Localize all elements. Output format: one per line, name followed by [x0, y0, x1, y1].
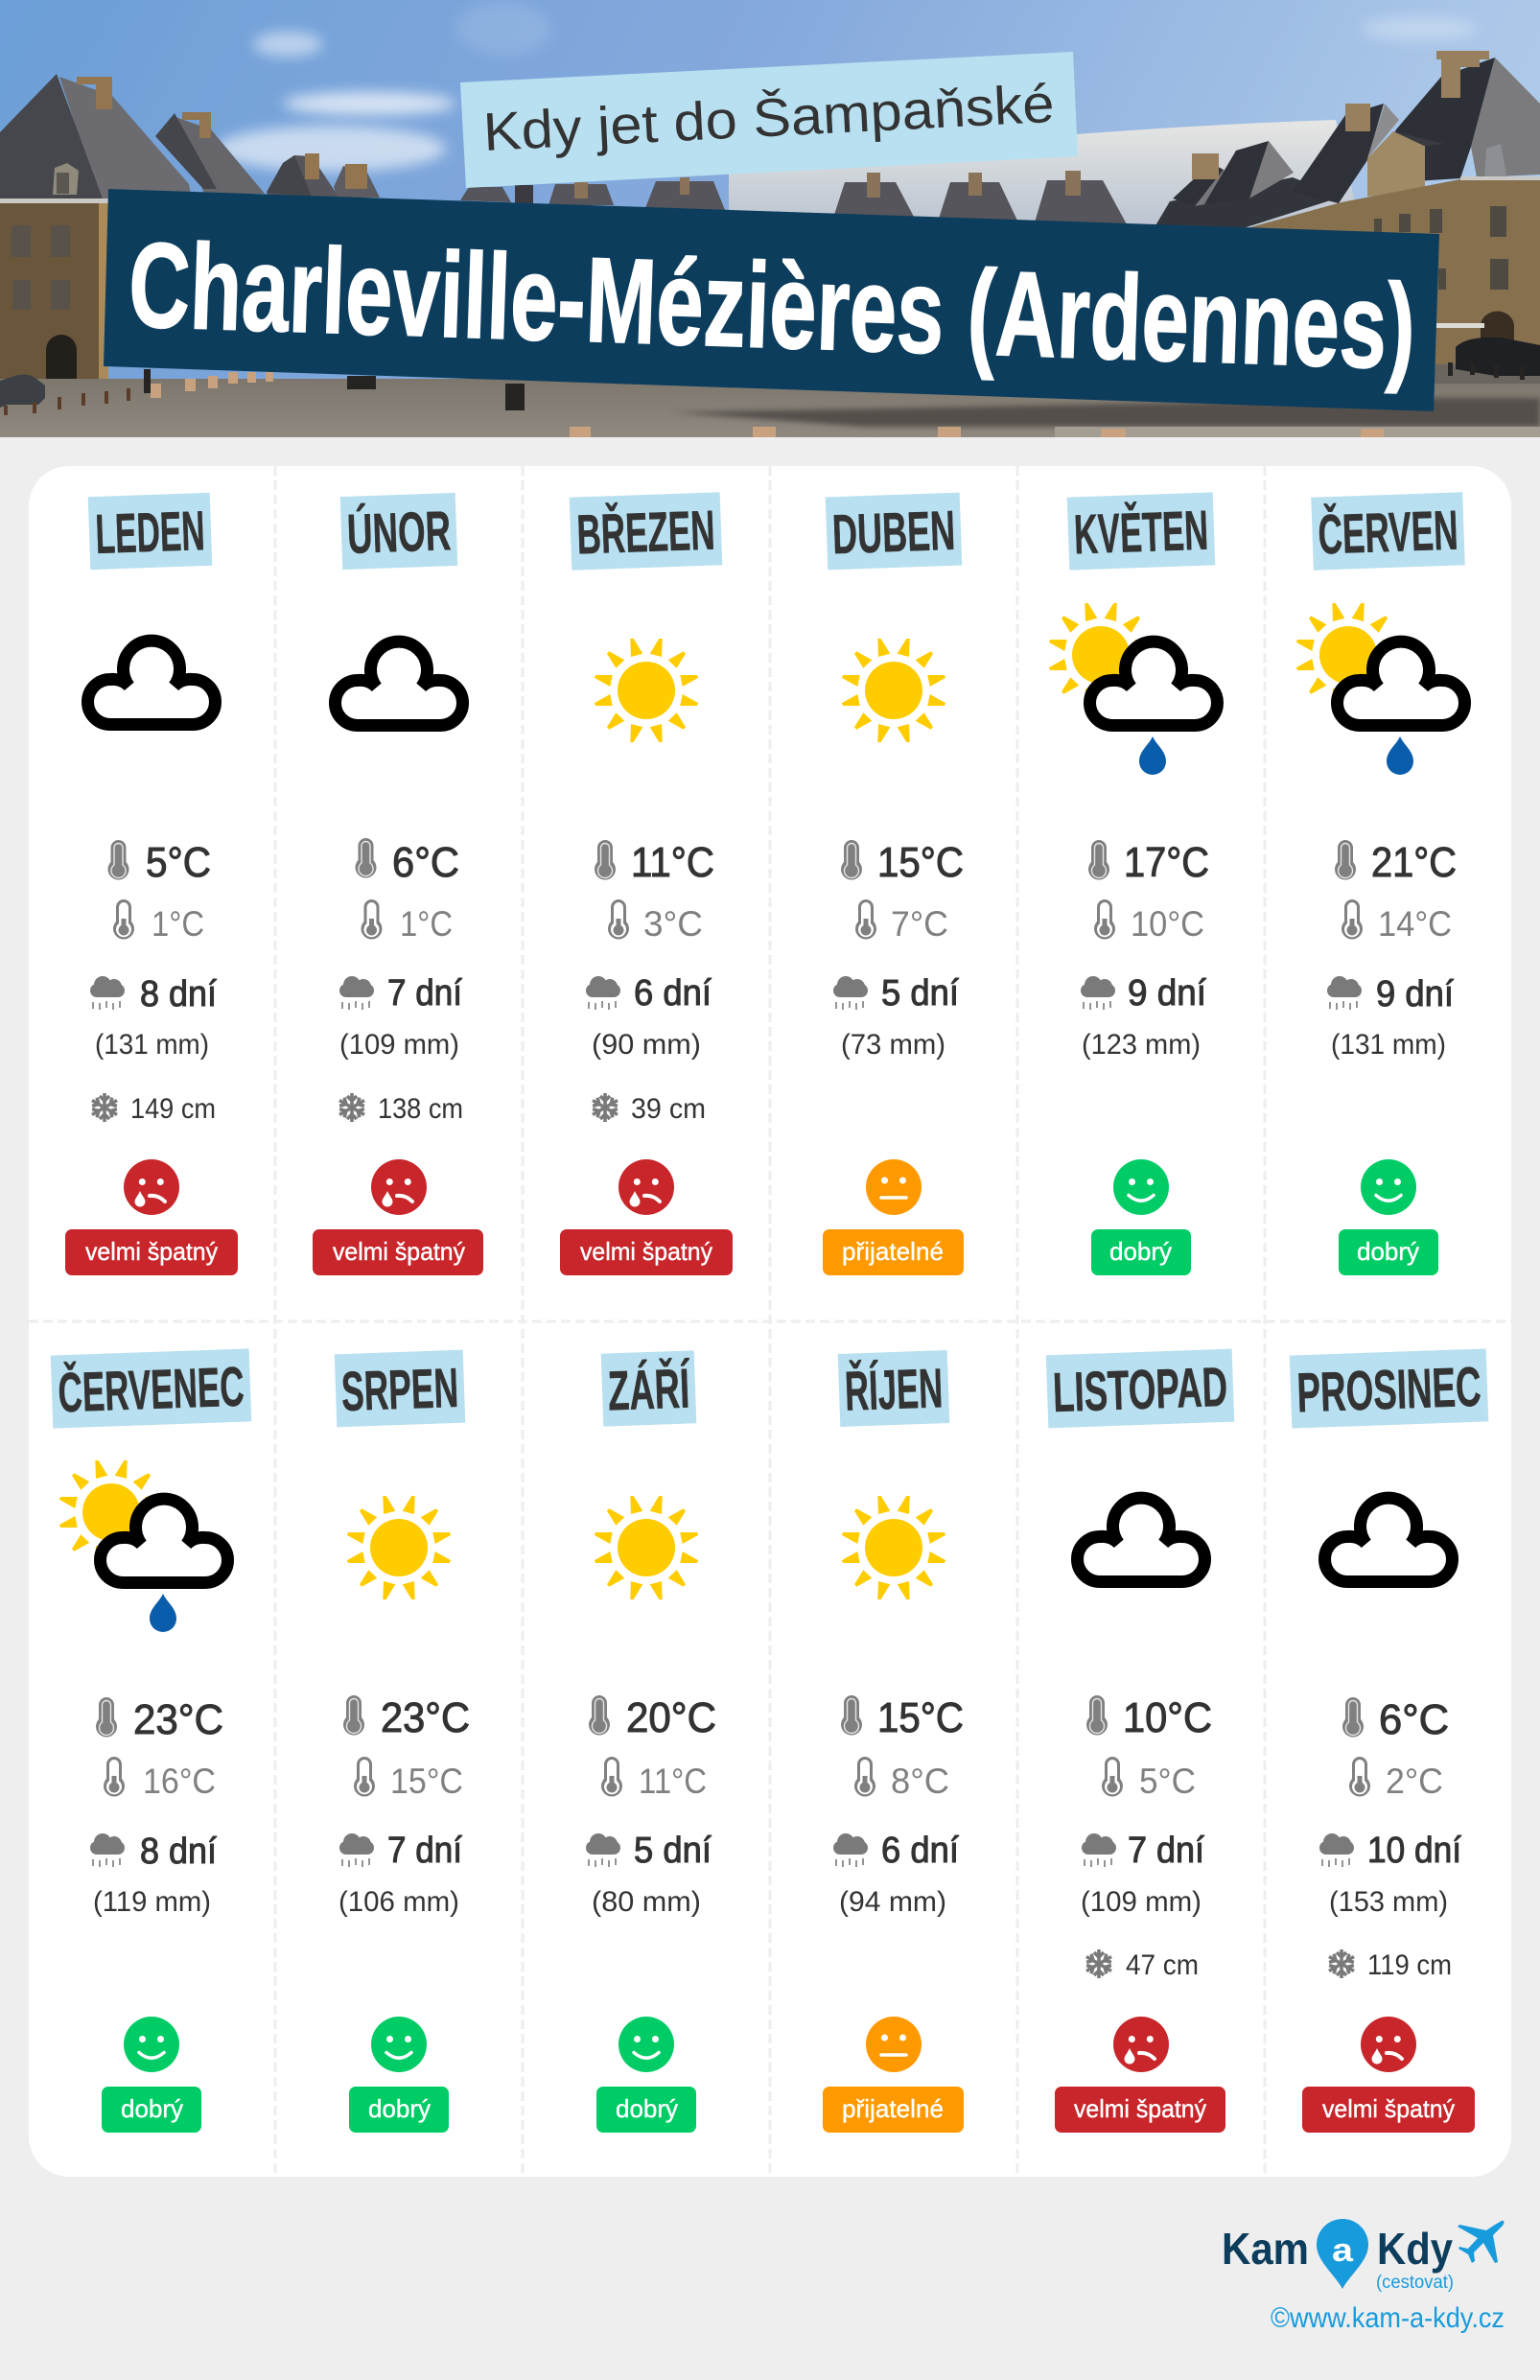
high temperature: 6°C — [392, 839, 459, 886]
rating pill — [65, 1229, 238, 1275]
rain days — [339, 1831, 462, 1871]
icon: cloud — [1078, 1498, 1204, 1582]
logo: Kam a Kdy — [1222, 2219, 1504, 2293]
low temperature — [601, 1757, 707, 1801]
high temperature: 6°C — [1379, 1696, 1449, 1743]
rain days: 10 dní — [1367, 1831, 1461, 1871]
snow — [90, 1093, 216, 1125]
snow: 149 cm — [130, 1093, 216, 1125]
rating face — [1361, 2017, 1416, 2072]
subtitle ribbon: Kdy jet do Šampaňské — [460, 52, 1078, 188]
month label — [1046, 1349, 1234, 1428]
rating pill: dobrý — [616, 2094, 678, 2123]
rainfall: (131 mm) — [1331, 1029, 1446, 1061]
month label — [1067, 492, 1215, 571]
rating face — [866, 2017, 922, 2072]
rating face — [618, 1159, 674, 1215]
rating pill — [313, 1229, 483, 1275]
month label — [88, 493, 212, 570]
month label: ÚNOR — [346, 500, 452, 566]
snow: 47 cm — [1126, 1949, 1199, 1981]
rain days: 7 dní — [387, 1831, 462, 1871]
low temperature: 8°C — [891, 1762, 949, 1801]
rain days — [586, 973, 712, 1014]
high temperature: 21°C — [1371, 839, 1457, 886]
snow — [1085, 1949, 1199, 1981]
low temperature: 15°C — [390, 1762, 463, 1801]
icon: cloud — [88, 641, 215, 725]
rating pill — [560, 1229, 733, 1275]
rainfall: (109 mm) — [1081, 1886, 1202, 1918]
low temperature: 1°C — [152, 904, 204, 944]
high temperature — [1342, 1696, 1449, 1743]
month label: ČERVENEC — [57, 1356, 245, 1424]
rating pill: velmi špatný — [580, 1237, 712, 1266]
ground — [0, 379, 1540, 437]
cell: říjen — [823, 1350, 964, 2133]
rating pill: velmi špatný — [333, 1237, 465, 1266]
icon: sun — [842, 1496, 945, 1599]
icon: sun, cloud and rain drop — [1049, 603, 1217, 775]
website credit: ©www.kam-a-kdy.cz — [1271, 2302, 1505, 2334]
month label: LISTOPAD — [1052, 1356, 1228, 1424]
rating pill — [1339, 1229, 1438, 1275]
right buildings — [1152, 177, 1342, 232]
high temperature: 5°C — [146, 839, 211, 886]
rain days: 5 dní — [634, 1831, 712, 1871]
rain days: 5 dní — [881, 973, 959, 1014]
rain days: 8 dní — [140, 1832, 217, 1872]
icon: cloud — [336, 642, 462, 725]
snow: 138 cm — [378, 1093, 463, 1125]
rainfall: (106 mm) — [338, 1886, 459, 1918]
month label — [340, 493, 457, 570]
rainfall: (131 mm) — [95, 1029, 209, 1061]
rainfall: (153 mm) — [1329, 1886, 1448, 1918]
icon: map pin: a — [1332, 2232, 1354, 2269]
low temperature: 16°C — [143, 1762, 216, 1801]
high temperature — [589, 1694, 716, 1741]
month label: LEDEN — [94, 500, 206, 566]
subtitle ribbon: Kdy jet do Šampaňské: Kdy jet do Šampaňské — [481, 73, 1056, 162]
rainfall: (119 mm) — [93, 1886, 211, 1918]
rating pill: velmi špatný — [1074, 2094, 1206, 2123]
high temperature: 10°C — [1123, 1694, 1212, 1741]
icon: sun — [595, 639, 698, 742]
rating pill: dobrý — [121, 2094, 183, 2123]
high temperature — [595, 839, 714, 886]
low temperature — [1094, 899, 1204, 944]
icon: sun — [595, 1496, 698, 1599]
logo: Kam a Kdy: Kdy — [1377, 2224, 1453, 2274]
rating pill: přijatelné — [842, 2094, 944, 2123]
rain days — [339, 973, 462, 1014]
high temperature: 17°C — [1124, 839, 1209, 886]
rating face — [1113, 2017, 1169, 2072]
rain days — [833, 973, 959, 1014]
low temperature — [354, 1757, 463, 1801]
rating face — [124, 2017, 179, 2072]
rain days — [586, 1831, 712, 1871]
rating face — [124, 1159, 179, 1215]
cell: červenec — [51, 1348, 251, 2133]
low temperature: 5°C — [1139, 1762, 1196, 1801]
rain days: 6 dní — [881, 1831, 959, 1871]
icon: sun — [347, 1496, 451, 1599]
month label — [335, 1350, 465, 1427]
icon: cloud — [1325, 1498, 1452, 1582]
rating face — [371, 1159, 427, 1215]
month label: DUBEN — [831, 500, 956, 566]
high temperature — [1088, 839, 1209, 886]
low temperature: 7°C — [891, 904, 948, 944]
month label: BŘEZEN — [575, 500, 716, 566]
high temperature: 20°C — [626, 1694, 716, 1741]
icon: sun, cloud and rain drop — [1296, 603, 1464, 775]
icon: map pin — [1317, 2219, 1368, 2289]
rainfall: (109 mm) — [339, 1029, 459, 1061]
low temperature — [113, 899, 204, 944]
month label: ZÁŘÍ — [607, 1357, 691, 1422]
rating pill: dobrý — [368, 2094, 431, 2123]
rain days — [1081, 973, 1206, 1014]
low temperature: 2°C — [1386, 1762, 1443, 1801]
month label — [51, 1348, 251, 1429]
rating face — [1113, 1159, 1169, 1215]
rainfall: (123 mm) — [1082, 1029, 1201, 1061]
rating pill — [1055, 2087, 1225, 2133]
cell: duben — [823, 493, 964, 1275]
rating face — [1361, 1159, 1416, 1215]
low temperature — [1102, 1757, 1196, 1801]
rain days: 7 dní — [1128, 1831, 1204, 1871]
rating pill — [596, 2087, 696, 2133]
low temperature — [1342, 899, 1452, 944]
high temperature: 11°C — [631, 839, 714, 886]
rain days: 9 dní — [1128, 973, 1206, 1014]
low temperature — [608, 899, 703, 944]
high temperature — [841, 839, 964, 886]
rating pill — [1091, 1229, 1191, 1275]
rating pill — [823, 2087, 964, 2133]
high temperature — [1335, 839, 1457, 886]
month label — [570, 492, 722, 571]
high temperature — [841, 1694, 964, 1741]
high temperature — [355, 838, 459, 886]
rating pill — [823, 1229, 964, 1275]
rating pill: dobrý — [1357, 1237, 1419, 1266]
rainfall: (73 mm) — [841, 1029, 945, 1061]
cell: listopad — [1046, 1349, 1234, 2133]
cell: květen — [1049, 492, 1217, 1275]
cell: září — [586, 1350, 716, 2133]
rain days — [1082, 1831, 1204, 1871]
rating face — [618, 2017, 674, 2072]
header photo: Place Ducale — [0, 0, 1540, 437]
low temperature — [1349, 1757, 1443, 1801]
left buildings — [334, 166, 380, 198]
snow — [1327, 1949, 1452, 1981]
cell: prosinec — [1290, 1348, 1488, 2133]
snow — [338, 1093, 463, 1125]
low temperature — [361, 899, 453, 944]
snow: 119 cm — [1367, 1949, 1452, 1981]
month label: ŘÍJEN — [844, 1357, 944, 1423]
low temperature: 14°C — [1378, 904, 1452, 944]
rain days — [1319, 1831, 1461, 1871]
high temperature: 15°C — [877, 839, 964, 886]
rainfall: (90 mm) — [592, 1029, 701, 1061]
distant roofs — [460, 180, 1127, 224]
rating pill — [349, 2087, 449, 2133]
high temperature: 23°C — [133, 1696, 223, 1743]
rain days — [833, 1831, 959, 1871]
low temperature: 1°C — [400, 904, 453, 944]
cell: únor — [313, 493, 483, 1275]
rain days: 8 dní — [140, 974, 217, 1015]
high temperature: 23°C — [381, 1694, 470, 1741]
rating pill: přijatelné — [842, 1237, 944, 1266]
rain days — [90, 1832, 217, 1872]
rain days: 9 dní — [1376, 974, 1454, 1015]
high temperature — [107, 839, 211, 886]
panel: monthly climate table — [29, 466, 1511, 2177]
logo: Kam a Kdy: Kam — [1222, 2224, 1309, 2274]
rain days — [1327, 974, 1454, 1015]
cell: červen — [1296, 492, 1465, 1275]
rating pill — [1302, 2087, 1475, 2133]
icon: sun, cloud and rain drop — [59, 1460, 227, 1632]
low temperature: 3°C — [643, 904, 703, 944]
logo: Kam a Kdy: (cestovat) — [1376, 2273, 1454, 2293]
cell: březen — [560, 492, 733, 1275]
rainfall: (94 mm) — [839, 1886, 946, 1918]
rainfall: (80 mm) — [592, 1886, 701, 1918]
low temperature — [104, 1757, 216, 1801]
high temperature: 15°C — [877, 1694, 964, 1741]
cell: leden — [65, 493, 238, 1275]
icon: sun — [842, 639, 945, 742]
rating pill: dobrý — [1109, 1237, 1172, 1266]
rating face — [371, 2017, 427, 2072]
snow — [591, 1093, 706, 1125]
low temperature: 11°C — [639, 1762, 707, 1801]
rain days — [90, 974, 217, 1015]
rain days: 7 dní — [387, 973, 462, 1014]
icon: airplane — [1458, 2221, 1504, 2263]
rating pill — [102, 2087, 201, 2133]
cell: srpen — [335, 1350, 470, 2133]
rating face — [866, 1159, 922, 1215]
month label: SRPEN — [340, 1357, 459, 1423]
month label — [826, 493, 962, 570]
snow: 39 cm — [631, 1093, 706, 1125]
month label — [838, 1350, 949, 1427]
low temperature — [855, 899, 948, 944]
rain days: 6 dní — [634, 973, 712, 1014]
high temperature — [96, 1696, 223, 1743]
month label: KVĚTEN — [1073, 500, 1209, 566]
high temperature — [1086, 1694, 1212, 1741]
low temperature: 10°C — [1131, 904, 1204, 944]
high temperature — [343, 1694, 470, 1741]
rating pill: velmi špatný — [85, 1237, 218, 1266]
month label — [601, 1350, 696, 1427]
month label — [1311, 492, 1465, 571]
rating pill: velmi špatný — [1322, 2094, 1455, 2123]
low temperature — [854, 1757, 949, 1801]
